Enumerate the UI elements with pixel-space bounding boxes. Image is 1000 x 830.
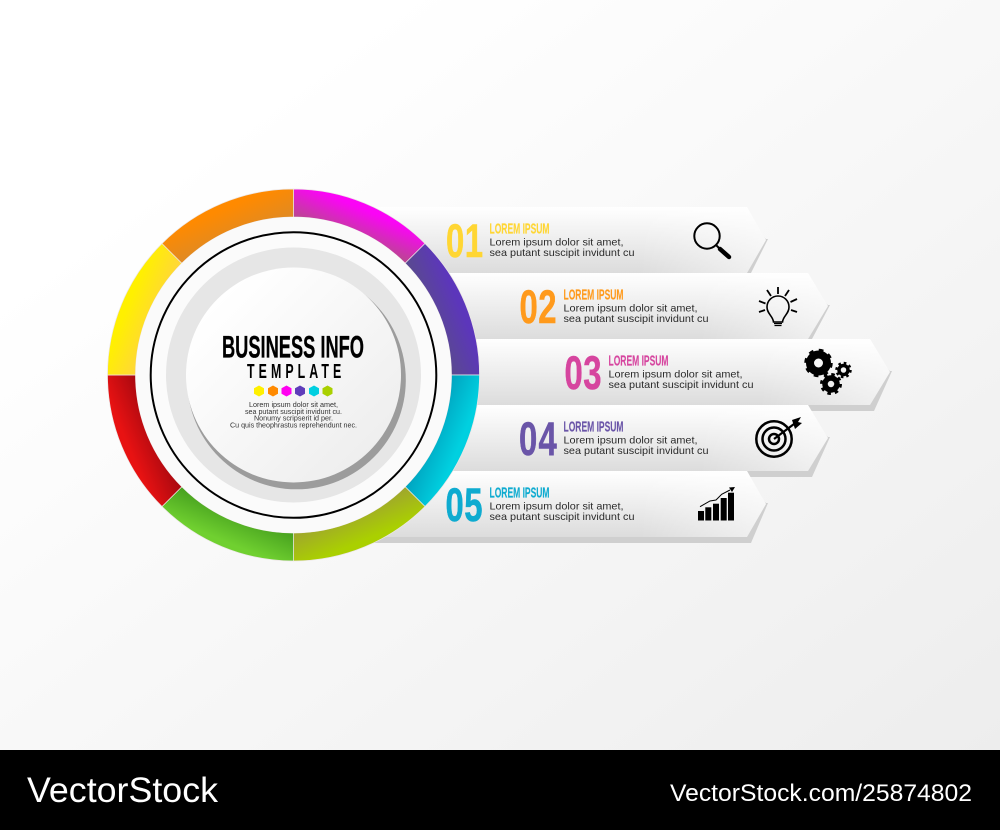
watermark brand: VectorStock: [27, 771, 219, 810]
centre disc: [186, 268, 401, 482]
item 03 text: 03: [564, 346, 602, 399]
centre description: [230, 402, 357, 430]
footer bar: [0, 750, 1000, 830]
watermark url: VectorStock.com/25874802: [670, 780, 972, 807]
item 04 text: [519, 412, 709, 465]
item 02 text: [520, 280, 709, 333]
icon: gears: [806, 350, 850, 394]
item 01 text: LOREM IPSUM: [490, 220, 550, 238]
item 04 text: Lorem ipsum dolor sit amet,: [564, 434, 698, 446]
item 05 text: LOREM IPSUM: [490, 484, 550, 502]
segment: lime: [294, 487, 425, 561]
black outline ring: [151, 232, 436, 518]
icon: growth chart: [698, 487, 735, 520]
item 02 text: LOREM IPSUM: [564, 286, 624, 304]
ribbon 5 shape: [300, 471, 768, 543]
inner white ring: [136, 217, 452, 533]
ribbon 4 shape: [300, 405, 830, 477]
grey band: [166, 248, 421, 502]
centre description: Cu quis theophrastus reprehendunt nec.: [230, 422, 357, 430]
segment: red: [108, 375, 182, 506]
segment: orange: [162, 189, 294, 263]
subtitle: TEMPLATE: [247, 360, 341, 383]
item 05 text: Lorem ipsum dolor sit amet,: [490, 500, 624, 512]
icon: target: [756, 417, 802, 457]
hexagon colour dots: [254, 386, 332, 396]
segment: green: [162, 487, 294, 561]
segment: purple: [405, 244, 480, 375]
item 02 text: Lorem ipsum dolor sit amet,: [564, 302, 698, 314]
item 03 text: Lorem ipsum dolor sit amet,: [608, 368, 742, 380]
item 04 text: sea putant suscipit invidunt cu: [564, 445, 709, 457]
crescent shadow: [187, 271, 406, 489]
item 03 text: LOREM IPSUM: [608, 352, 668, 370]
centre description: Lorem ipsum dolor sit amet,: [249, 402, 338, 409]
item 02 text: sea putant suscipit invidunt cu: [564, 313, 709, 325]
item 04 text: 04: [519, 412, 557, 465]
ribbon 3 shape: [300, 339, 892, 411]
item 05 text: 05: [446, 478, 483, 531]
segment: yellow: [108, 244, 182, 375]
colour ring: [108, 189, 480, 561]
centre dial: [136, 217, 452, 533]
item 02 text: 02: [520, 280, 557, 333]
centre description: sea putant suscipit invidunt cu.: [245, 409, 342, 416]
item 03 text: [564, 346, 754, 399]
item 05 text: [446, 478, 635, 531]
icon: magnifier: [694, 223, 729, 257]
item 04 text: LOREM IPSUM: [564, 418, 624, 436]
ribbon 2 shape: [300, 273, 830, 345]
item 01 text: sea putant suscipit invidunt cu: [490, 247, 635, 259]
item 03 text: sea putant suscipit invidunt cu: [608, 379, 754, 391]
item 05 text: sea putant suscipit invidunt cu: [490, 511, 635, 523]
centre description: Nonumy scripserit id per.: [254, 416, 333, 422]
item 01 text: Lorem ipsum dolor sit amet,: [490, 236, 624, 248]
item 01 text: [446, 214, 635, 267]
centre title: BUSINESS INFO: [222, 328, 364, 364]
segment: cyan: [405, 375, 480, 506]
segment: magenta: [294, 189, 425, 263]
icon: light bulb: [759, 287, 797, 326]
item 01 text: 01: [446, 214, 483, 267]
centre title: [222, 328, 364, 383]
ribbon 1 shape: [300, 207, 768, 279]
